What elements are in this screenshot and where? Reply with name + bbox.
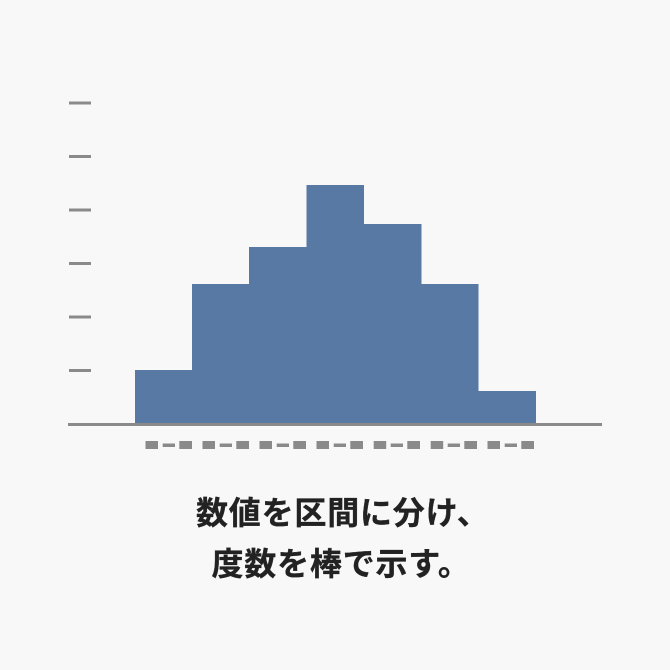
caption line 1: 数値を区間に分け、: [196, 495, 490, 531]
caption line 2: 度数を棒で示す。: [212, 546, 471, 582]
y-axis ticks: [69, 102, 91, 372]
histogram bars: [135, 185, 536, 424]
x-axis baseline: [68, 423, 602, 426]
x-axis range labels: [146, 441, 534, 449]
